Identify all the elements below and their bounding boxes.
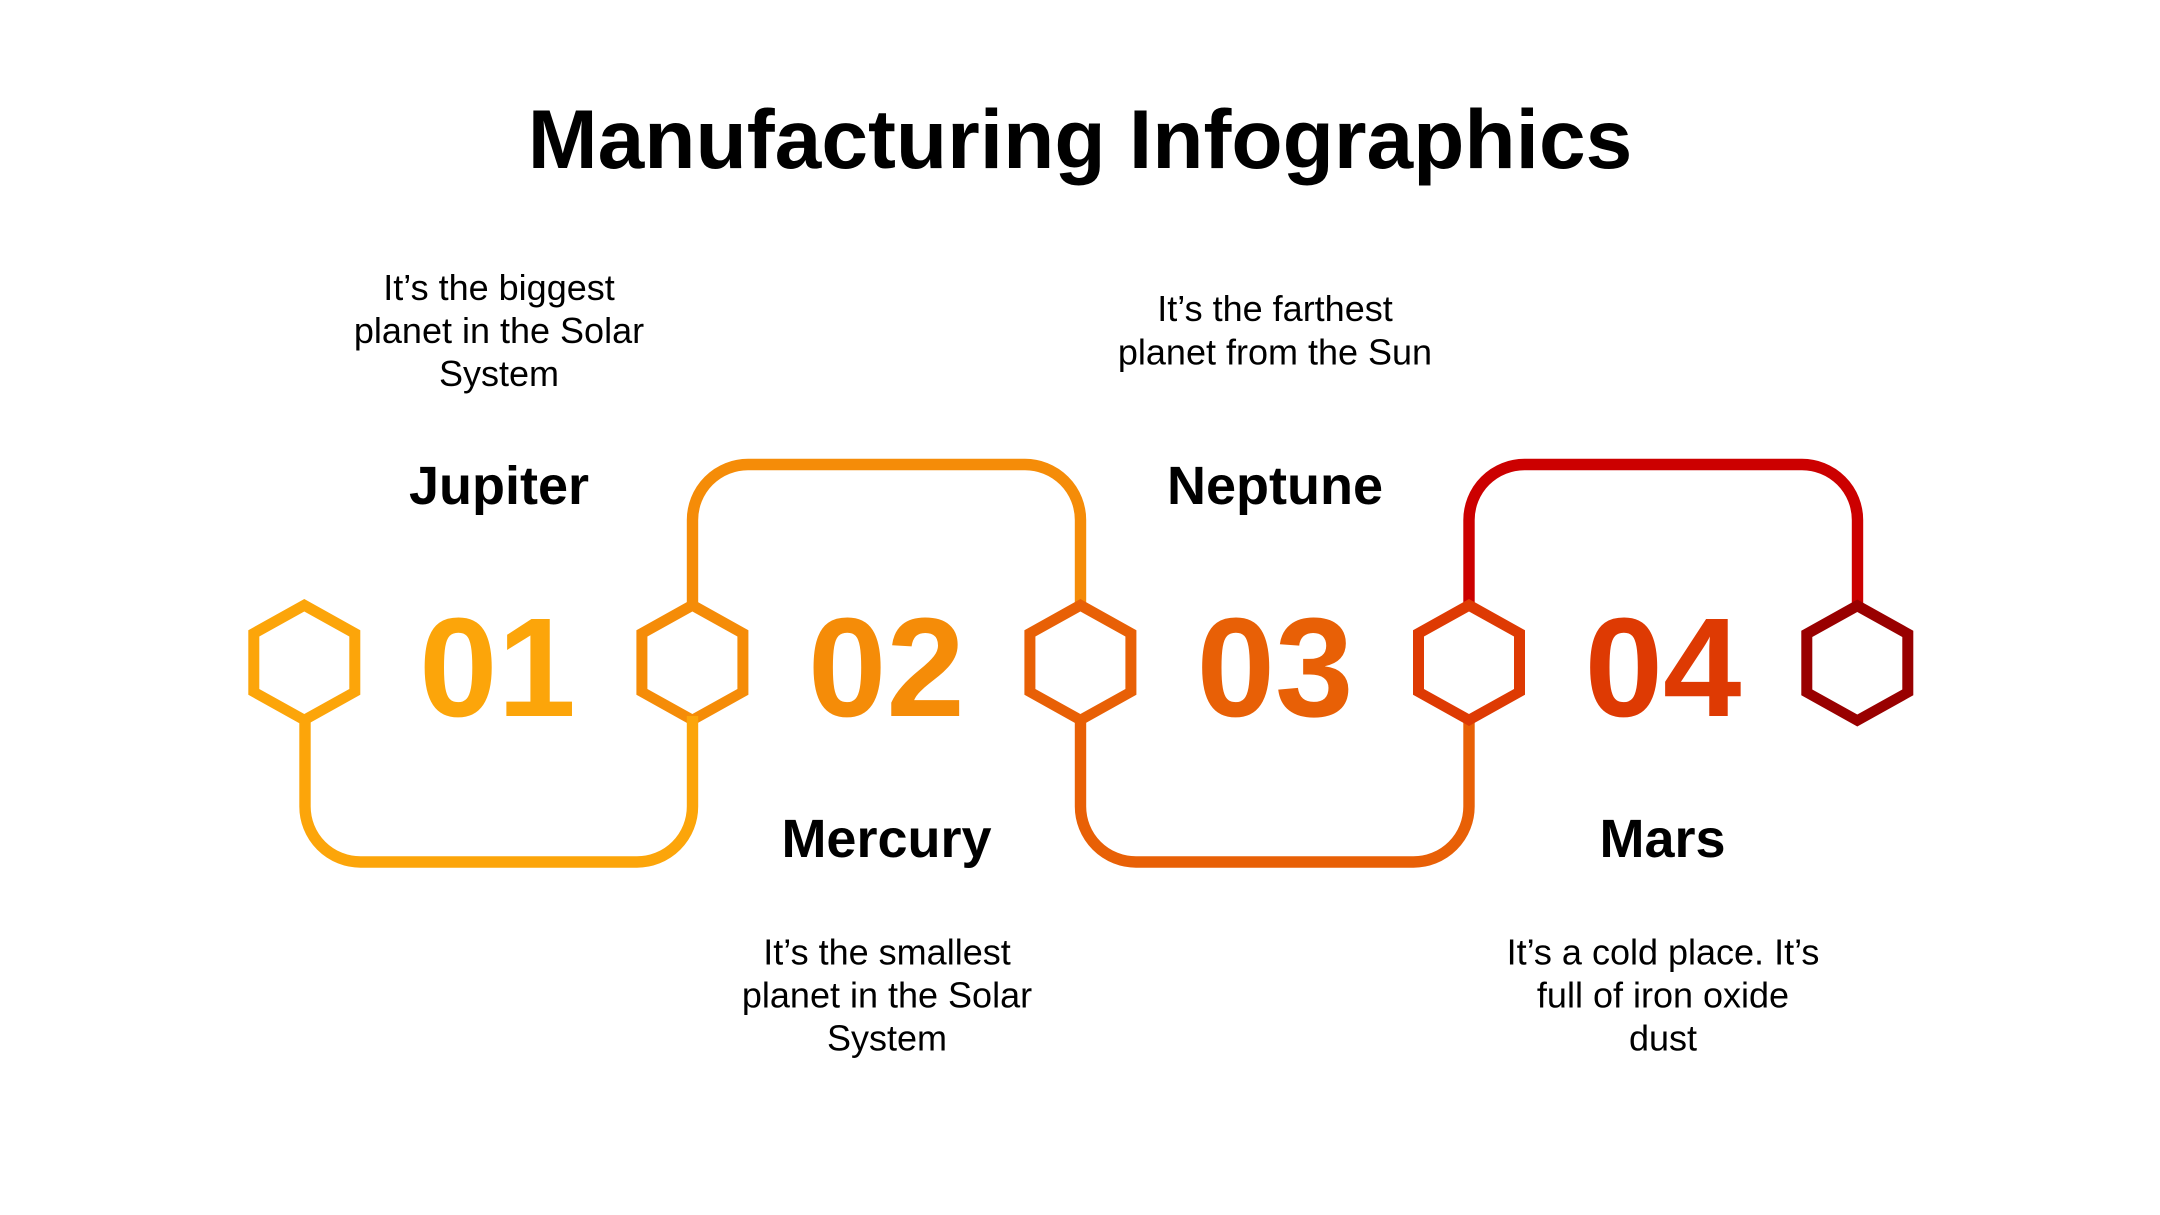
connector: top 4 to 5	[1469, 464, 1858, 610]
connector: top 2 to 3	[692, 464, 1080, 610]
hexagon 3	[1024, 599, 1136, 726]
hexagon 2	[636, 599, 748, 726]
text: Jupiter description: planet in the Solar	[354, 310, 644, 351]
hexagon 1	[248, 599, 360, 726]
text: Neptune description: It’s the farthest	[1157, 288, 1393, 329]
heading: Neptune: Neptune	[1167, 456, 1383, 516]
connector: bottom 1 to 2	[305, 716, 692, 862]
heading: Jupiter: Jupiter	[409, 456, 589, 516]
hexagon 4	[1413, 599, 1525, 726]
number 03: 03	[1197, 588, 1353, 746]
heading: Mars: Mars	[1599, 809, 1726, 869]
text: Neptune description: planet from the Sun	[1118, 332, 1432, 372]
text: Mercury description: planet in the Solar	[742, 974, 1032, 1016]
text: Jupiter description: System	[439, 353, 559, 394]
text: Mercury description: System	[827, 1018, 947, 1058]
text: Mars description: full of iron oxide	[1537, 974, 1789, 1016]
number 01: 01	[419, 588, 576, 746]
heading: Mercury: Mercury	[781, 809, 992, 869]
connector: bottom 3 to 4	[1080, 715, 1469, 862]
number 02: 02	[808, 588, 965, 746]
text: Mars description: dust	[1629, 1018, 1697, 1058]
title: Manufacturing Infographics	[528, 92, 1632, 186]
text: Mercury description: It’s the smallest	[763, 932, 1011, 972]
text: Jupiter description: It’s the biggest	[383, 267, 615, 308]
hexagon 5	[1801, 600, 1913, 726]
number 04: 04	[1585, 588, 1741, 746]
text: Mars description: It’s a cold place. It’s	[1507, 932, 1819, 972]
